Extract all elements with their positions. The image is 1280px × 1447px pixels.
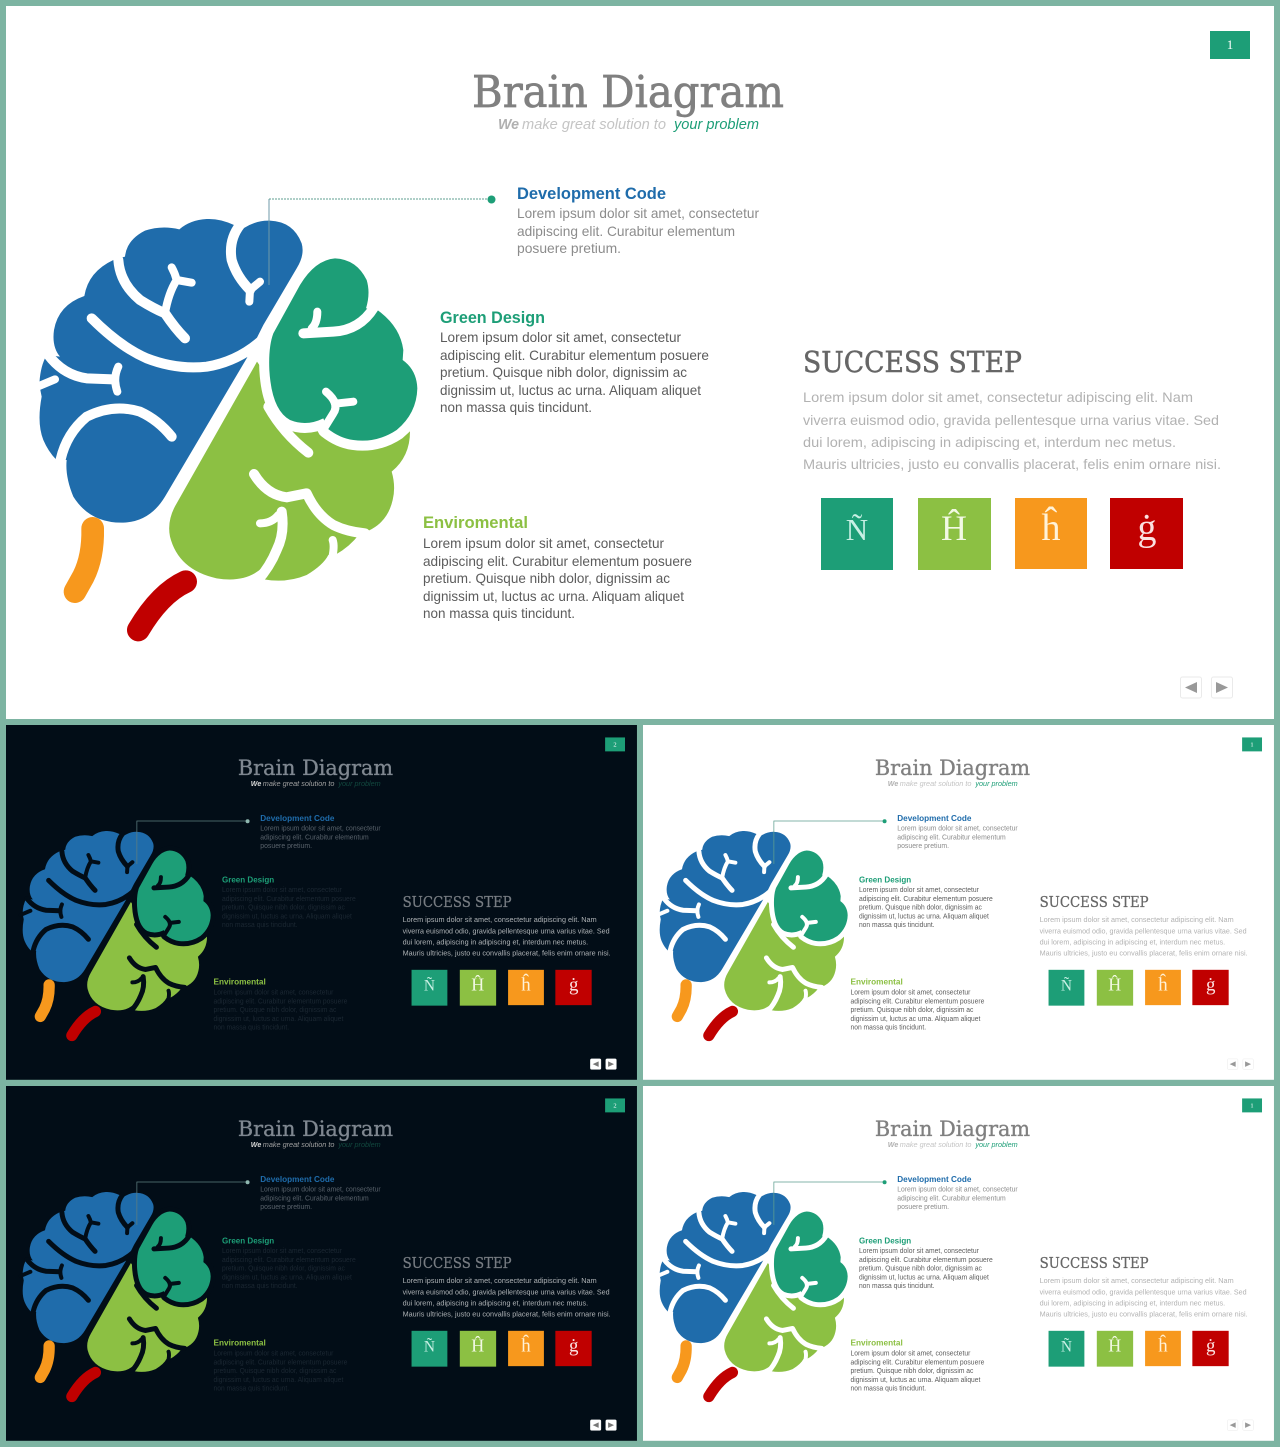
text block: green design: adipiscing elit. Curabitur elementum posuere — [859, 896, 993, 903]
text block: development code — [897, 813, 1018, 850]
text block: success step: viverra euismod odio, gravida pellentesque urna varius vitae. Sed — [403, 1289, 610, 1296]
text block: development code — [260, 813, 381, 850]
subtitle: your problem — [974, 1140, 1018, 1149]
page number badge: 1 — [1250, 1102, 1254, 1109]
subtitle: make great solution to — [263, 1140, 334, 1149]
text block: development code: Development Code — [260, 813, 335, 823]
page number badge — [1242, 737, 1262, 751]
text block: success step — [403, 1278, 611, 1318]
text block: enviromental: pretium. Quisque nibh dolor, dignissim ac — [423, 570, 670, 586]
text block: green design: adipiscing elit. Curabitur elementum posuere — [222, 896, 356, 903]
text block: enviromental: non massa quis tincidunt. — [850, 1025, 926, 1032]
subtitle: your problem — [974, 779, 1018, 788]
text block: development code: Development Code — [897, 813, 972, 823]
text block: development code: posuere pretium. — [517, 240, 621, 256]
text block: development code — [517, 184, 759, 256]
text block: development code: Lorem ipsum dolor sit amet, consectetur — [897, 825, 1018, 832]
icon squares: ĥ — [521, 974, 531, 996]
heading: success step: SUCCESS STEP — [1040, 895, 1149, 911]
text block: development code: adipiscing elit. Curabitur elementum — [897, 834, 1006, 841]
icon squares: ġ — [1206, 1336, 1216, 1357]
text block: enviromental: Enviromental — [850, 1338, 903, 1348]
icon squares: Ĥ — [1108, 1335, 1121, 1356]
subtitle — [251, 779, 381, 788]
text block: success step: viverra euismod odio, gravida pellentesque urna varius vitae. Sed — [1040, 1289, 1247, 1296]
text block: success step: dui lorem, adipiscing in adipiscing et, interdum nec metus. — [403, 1300, 588, 1307]
text block: green design: non massa quis tincidunt. — [222, 1283, 298, 1290]
text block: green design: adipiscing elit. Curabitur elementum posuere — [440, 347, 709, 363]
text block: development code: Development Code — [517, 184, 666, 203]
connector line — [774, 819, 887, 864]
text block: green design: Lorem ipsum dolor sit amet, consectetur — [859, 887, 980, 894]
text block: success step: Mauris ultricies, justo eu convallis placerat, felis enim ornare nisi. — [1040, 1311, 1248, 1318]
brain illustration — [20, 1192, 211, 1397]
text block: development code — [897, 1174, 1018, 1211]
subtitle — [498, 116, 759, 133]
page number badge: 2 — [613, 741, 617, 748]
subtitle — [888, 779, 1018, 788]
text block: green design: non massa quis tincidunt. — [222, 922, 298, 929]
icon squares: Ĥ — [471, 1335, 484, 1356]
icon squares: ĥ — [1158, 1335, 1168, 1357]
text block: enviromental: Lorem ipsum dolor sit amet, consectetur — [213, 1351, 334, 1358]
text block: success step: Lorem ipsum dolor sit amet, consectetur adipiscing elit. Nam — [1040, 917, 1234, 924]
text block: enviromental: Enviromental — [213, 977, 266, 987]
subtitle: your problem — [337, 1140, 381, 1149]
text block: enviromental: pretium. Quisque nibh dolor, dignissim ac — [213, 1368, 337, 1375]
icon squares: Ñ — [424, 1339, 435, 1356]
text block: green design: Green Design — [222, 1236, 274, 1246]
heading: success step: SUCCESS STEP — [1040, 1256, 1149, 1272]
text block: enviromental: Enviromental — [850, 977, 903, 987]
panel: light slide bottom — [643, 1086, 1274, 1441]
title: Brain Diagram — [238, 756, 393, 781]
panel: dark slide bottom — [6, 1086, 637, 1441]
icon squares — [412, 1331, 592, 1367]
connector line — [137, 819, 250, 864]
text block: enviromental: dignissim ut, luctus ac urna. Aliquam aliquet — [213, 1377, 343, 1384]
text block: enviromental: Enviromental — [213, 1338, 266, 1348]
text block: green design — [222, 1236, 356, 1290]
text block: enviromental: non massa quis tincidunt. — [213, 1386, 289, 1393]
subtitle: We — [251, 779, 261, 788]
text block: success step: Mauris ultricies, justo eu convallis placerat, felis enim ornare nisi. — [1040, 950, 1248, 957]
title: Brain Diagram — [472, 67, 784, 118]
text block: enviromental: non massa quis tincidunt. — [213, 1025, 289, 1032]
text block: development code: adipiscing elit. Curabitur elementum — [260, 1195, 369, 1202]
text block: green design: pretium. Quisque nibh dolor, dignissim ac — [222, 905, 345, 912]
text block: green design: non massa quis tincidunt. — [859, 1283, 935, 1290]
subtitle: your problem — [337, 779, 381, 788]
text block: enviromental — [850, 1338, 984, 1393]
text block: enviromental: adipiscing elit. Curabitur elementum posuere — [850, 1360, 984, 1367]
icon squares: ġ — [1138, 507, 1156, 549]
text block: enviromental: dignissim ut, luctus ac urna. Aliquam aliquet — [850, 1377, 980, 1384]
panel: light slide top — [643, 725, 1274, 1080]
text block: enviromental: Lorem ipsum dolor sit amet, consectetur — [213, 990, 334, 997]
subtitle: We — [251, 1140, 261, 1149]
heading: success step: SUCCESS STEP — [803, 345, 1022, 379]
page number badge: 2 — [613, 1102, 617, 1109]
text block: development code: posuere pretium. — [260, 843, 312, 850]
text block: green design — [222, 875, 356, 929]
text block: green design: Green Design — [859, 875, 911, 885]
icon squares — [1049, 970, 1229, 1006]
text block: enviromental: adipiscing elit. Curabitur elementum posuere — [423, 553, 692, 569]
text block: green design: dignissim ut, luctus ac urna. Aliquam aliquet — [222, 1275, 352, 1282]
subtitle: We — [498, 116, 519, 133]
text block: enviromental: adipiscing elit. Curabitur elementum posuere — [213, 999, 347, 1006]
text block: development code: Lorem ipsum dolor sit amet, consectetur — [260, 1186, 381, 1193]
text block: success step: viverra euismod odio, gravida pellentesque urna varius vitae. Sed — [1040, 928, 1247, 935]
icon squares: ġ — [569, 1336, 579, 1357]
text block: green design: pretium. Quisque nibh dolor, dignissim ac — [440, 364, 687, 380]
text block: enviromental: non massa quis tincidunt. — [423, 605, 575, 621]
icon squares: ĥ — [1042, 506, 1060, 549]
title: Brain Diagram — [875, 756, 1030, 781]
icon squares: Ĥ — [471, 974, 484, 995]
text block: green design: Lorem ipsum dolor sit amet, consectetur — [440, 329, 681, 345]
text block: green design: pretium. Quisque nibh dolor, dignissim ac — [859, 905, 982, 912]
text block: green design: non massa quis tincidunt. — [440, 399, 592, 415]
text block: green design: non massa quis tincidunt. — [859, 922, 935, 929]
connector line — [774, 1180, 887, 1225]
text block: enviromental: dignissim ut, luctus ac urna. Aliquam aliquet — [423, 588, 684, 604]
text block: enviromental — [850, 977, 984, 1032]
text block: green design: Lorem ipsum dolor sit amet, consectetur — [222, 887, 343, 894]
text block: development code: Lorem ipsum dolor sit amet, consectetur — [517, 205, 759, 221]
page number badge — [1210, 31, 1250, 59]
text block: green design — [859, 875, 993, 929]
text block: success step: Lorem ipsum dolor sit amet, consectetur adipiscing elit. Nam — [1040, 1278, 1234, 1285]
icon squares: Ñ — [1061, 1339, 1072, 1356]
page number badge — [605, 1098, 625, 1112]
subtitle: We — [888, 779, 898, 788]
title: Brain Diagram — [875, 1117, 1030, 1142]
subtitle: We — [888, 1140, 898, 1149]
text block: enviromental: Lorem ipsum dolor sit amet, consectetur — [850, 990, 971, 997]
text block: green design — [859, 1236, 993, 1290]
text block: enviromental: dignissim ut, luctus ac urna. Aliquam aliquet — [213, 1016, 343, 1023]
subtitle: make great solution to — [900, 779, 971, 788]
navigation buttons — [590, 1059, 616, 1069]
panel: dark slide top — [6, 725, 637, 1080]
brain illustration — [657, 1192, 848, 1397]
icon squares — [412, 970, 592, 1006]
icon squares: ġ — [569, 975, 579, 996]
text block: green design: dignissim ut, luctus ac urna. Aliquam aliquet — [440, 382, 701, 398]
text block: success step: dui lorem, adipiscing in adipiscing et, interdum nec metus. — [403, 939, 588, 946]
subtitle: make great solution to — [522, 116, 666, 133]
text block: success step: dui lorem, adipiscing in adipiscing et, interdum nec metus. — [1040, 939, 1225, 946]
text block: green design — [440, 308, 709, 415]
text block: development code: posuere pretium. — [260, 1204, 312, 1211]
text block: green design: pretium. Quisque nibh dolor, dignissim ac — [859, 1266, 982, 1273]
page number badge: 1 — [1250, 741, 1254, 748]
brain illustration — [20, 831, 211, 1036]
text block: green design: Lorem ipsum dolor sit amet, consectetur — [222, 1248, 343, 1255]
brain illustration — [657, 831, 848, 1036]
text block: success step — [1040, 1278, 1248, 1318]
text block: enviromental: pretium. Quisque nibh dolor, dignissim ac — [850, 1007, 974, 1014]
icon squares: Ñ — [424, 978, 435, 995]
text block: enviromental — [213, 1338, 347, 1393]
text block: enviromental: non massa quis tincidunt. — [850, 1386, 926, 1393]
icon squares — [821, 498, 1183, 570]
page number badge — [1242, 1098, 1262, 1112]
icon squares: ĥ — [521, 1335, 531, 1357]
title: Brain Diagram — [238, 1117, 393, 1142]
text block: success step: Lorem ipsum dolor sit amet, consectetur adipiscing elit. Nam — [403, 1278, 597, 1285]
text block: success step — [403, 917, 611, 957]
icon squares: ġ — [1206, 975, 1216, 996]
text block: enviromental: pretium. Quisque nibh dolor, dignissim ac — [213, 1007, 337, 1014]
text block: success step — [1040, 917, 1248, 957]
text block: enviromental: Lorem ipsum dolor sit amet, consectetur — [850, 1351, 971, 1358]
text block: enviromental: Enviromental — [423, 513, 528, 532]
text block: green design: dignissim ut, luctus ac urna. Aliquam aliquet — [222, 914, 352, 921]
page number badge: 1 — [1227, 37, 1233, 52]
text block: success step: Lorem ipsum dolor sit amet, consectetur adipiscing elit. Nam — [403, 917, 597, 924]
brain illustration — [35, 219, 417, 630]
text block: development code: Development Code — [897, 1174, 972, 1184]
text block: enviromental: pretium. Quisque nibh dolor, dignissim ac — [850, 1368, 974, 1375]
text block: development code: posuere pretium. — [897, 843, 949, 850]
text block: success step: Lorem ipsum dolor sit amet, consectetur adipiscing elit. Nam — [803, 389, 1193, 405]
icon squares — [1049, 1331, 1229, 1367]
connector line — [269, 196, 496, 285]
text block: green design: Green Design — [222, 875, 274, 885]
heading: success step: SUCCESS STEP — [403, 1256, 512, 1272]
text block: enviromental: dignissim ut, luctus ac urna. Aliquam aliquet — [850, 1016, 980, 1023]
text block: success step: viverra euismod odio, gravida pellentesque urna varius vitae. Sed — [403, 928, 610, 935]
text block: success step: Mauris ultricies, justo eu convallis placerat, felis enim ornare nisi. — [803, 456, 1221, 472]
text block: success step — [803, 389, 1221, 472]
text block: development code: Lorem ipsum dolor sit amet, consectetur — [260, 825, 381, 832]
navigation buttons — [1227, 1420, 1253, 1430]
text block: development code: adipiscing elit. Curabitur elementum — [260, 834, 369, 841]
text block: development code — [260, 1174, 381, 1211]
text block: green design: Lorem ipsum dolor sit amet, consectetur — [859, 1248, 980, 1255]
text block: green design: Green Design — [859, 1236, 911, 1246]
heading: success step: SUCCESS STEP — [403, 895, 512, 911]
subtitle: your problem — [673, 116, 759, 133]
icon squares: Ñ — [1061, 978, 1072, 995]
text block: success step: dui lorem, adipiscing in adipiscing et, interdum nec metus. — [1040, 1300, 1225, 1307]
text block: green design: dignissim ut, luctus ac urna. Aliquam aliquet — [859, 914, 989, 921]
page number badge — [605, 737, 625, 751]
text block: development code: adipiscing elit. Curabitur elementum — [517, 223, 735, 239]
text block: success step: Mauris ultricies, justo eu convallis placerat, felis enim ornare nisi. — [403, 950, 611, 957]
panel: main slide — [6, 6, 1274, 719]
text block: enviromental: adipiscing elit. Curabitur elementum posuere — [850, 999, 984, 1006]
text block: development code: Lorem ipsum dolor sit amet, consectetur — [897, 1186, 1018, 1193]
text block: development code: posuere pretium. — [897, 1204, 949, 1211]
text block: enviromental: Lorem ipsum dolor sit amet, consectetur — [423, 535, 664, 551]
subtitle — [251, 1140, 381, 1149]
text block: enviromental — [423, 513, 692, 621]
navigation buttons — [590, 1420, 616, 1430]
icon squares: Ĥ — [941, 508, 967, 548]
text block: green design: dignissim ut, luctus ac urna. Aliquam aliquet — [859, 1275, 989, 1282]
text block: development code: Development Code — [260, 1174, 335, 1184]
icon squares: Ĥ — [1108, 974, 1121, 995]
text block: success step: viverra euismod odio, gravida pellentesque urna varius vitae. Sed — [803, 412, 1219, 428]
text block: enviromental — [213, 977, 347, 1032]
navigation buttons — [1227, 1059, 1253, 1069]
icon squares: Ñ — [846, 512, 868, 547]
text block: green design: adipiscing elit. Curabitur elementum posuere — [222, 1257, 356, 1264]
subtitle — [888, 1140, 1018, 1149]
text block: green design: Green Design — [440, 308, 545, 327]
connector line — [137, 1180, 250, 1225]
text block: success step: Mauris ultricies, justo eu convallis placerat, felis enim ornare nisi. — [403, 1311, 611, 1318]
text block: enviromental: adipiscing elit. Curabitur elementum posuere — [213, 1360, 347, 1367]
navigation buttons — [1180, 677, 1232, 698]
icon squares: ĥ — [1158, 974, 1168, 996]
subtitle: make great solution to — [263, 779, 334, 788]
text block: success step: dui lorem, adipiscing in adipiscing et, interdum nec metus. — [803, 434, 1176, 450]
subtitle: make great solution to — [900, 1140, 971, 1149]
text block: green design: adipiscing elit. Curabitur elementum posuere — [859, 1257, 993, 1264]
text block: green design: pretium. Quisque nibh dolor, dignissim ac — [222, 1266, 345, 1273]
text block: development code: adipiscing elit. Curabitur elementum — [897, 1195, 1006, 1202]
